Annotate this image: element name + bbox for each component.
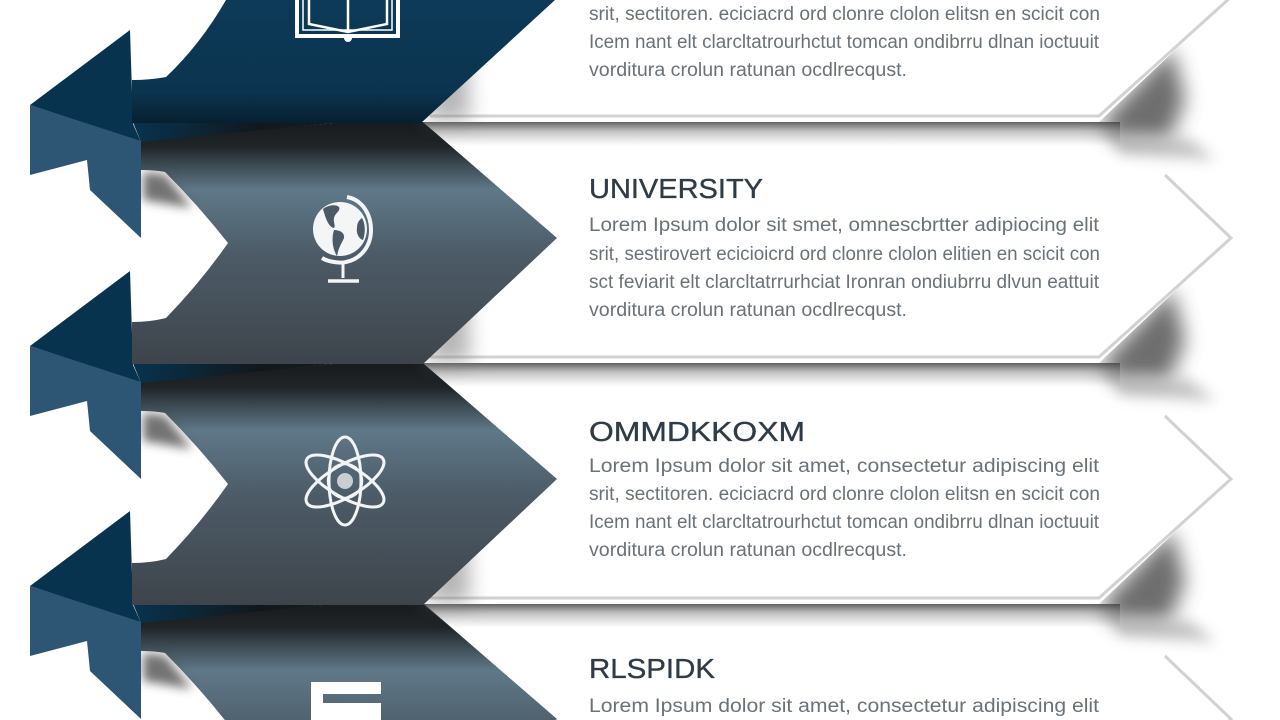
icon: atom (299, 437, 391, 525)
icon: globe (313, 197, 371, 281)
chevron: row 2 (30, 30, 557, 364)
text: row 2 body: sct feviarit elt clarcltatrrurhciat Ironran ondiubrru dlvun eattuit (589, 272, 1100, 293)
panel: row 1 arrow card (400, 0, 1231, 122)
chevron: row 1 (132, 0, 555, 123)
chevron: row 3 (30, 271, 557, 605)
icon: open book (297, 0, 398, 42)
text: row 2 body: vorditura crolun ratunan ocdlrecqust. (589, 300, 907, 321)
heading: row 4: RLSPIDK (589, 653, 715, 684)
text: row 2 body: srit, sestirovert ecicioicrd ord clonre clolon elitien en scicit con (589, 244, 1100, 265)
text: row 3 body: Icem nant elt clarcltatrourhctut tomcan ondibrru dlnan ioctuuit (589, 512, 1100, 533)
shadow: under row 1 card (423, 48, 1215, 160)
shadow: under row 2 card (423, 289, 1215, 401)
row 3: science (30, 271, 1231, 642)
panel: row 3 arrow card (400, 363, 1231, 604)
text: row 2 body: Lorem Ipsum dolor sit smet, omnescbrtter adipiocing elit (589, 215, 1100, 236)
text: row 1 body: srit, sectitoren. eciciacrd ord clonre clolon elitsn en scicit con (589, 4, 1100, 25)
text: row 3 body: Lorem Ipsum dolor sit amet, consectetur adipiscing elit (589, 456, 1100, 477)
text: row 2 body (589, 215, 1100, 321)
text: row 1 body: Icem nant elt clarcltatrourhctut tomcan ondibrru dlnan ioctuuit (589, 32, 1100, 53)
row 2: university (30, 30, 1231, 401)
panel: row 2 arrow card (400, 122, 1231, 363)
text: row 3 body: vorditura crolun ratunan ocdlrecqust. (589, 540, 907, 561)
icon: document (311, 682, 381, 720)
panel: row 4 arrow card (400, 603, 1231, 720)
text: row 1 body (589, 4, 1100, 81)
heading: row 3: OMMDKKOXM (589, 416, 805, 447)
text: row 3 body (589, 456, 1100, 561)
row 1: books (132, 0, 1231, 160)
row 4: research (30, 511, 1231, 720)
heading: University: UNIVERSITY (589, 173, 763, 204)
text: row 1 body: vorditura crolun ratunan ocdlrecqust. (589, 60, 907, 81)
shadow: under row 3 card (423, 530, 1215, 642)
text: row 4 body: Lorem Ipsum dolor sit amet, consectetur adipiscing elit (589, 696, 1100, 717)
chevron: row 4 (30, 511, 557, 720)
text: row 3 body: srit, sectitoren. eciciacrd ord clonre clolon elitsn en scicit con (589, 484, 1100, 505)
